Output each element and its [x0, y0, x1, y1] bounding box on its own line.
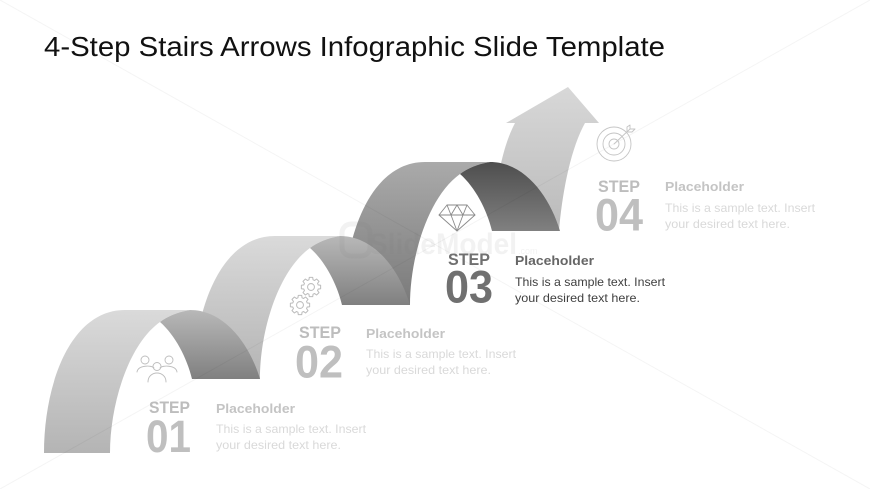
step 2 text: STEP [299, 323, 341, 342]
step 2 text: 02 [295, 336, 343, 388]
step 1 text: This is a sample text. Insert [216, 422, 367, 436]
icon: target [597, 125, 635, 161]
step 2 text [295, 323, 517, 388]
step 4 text: STEP [598, 177, 640, 196]
step 3 text [445, 250, 666, 312]
icon: diamond [439, 205, 475, 231]
step 3 text: your desired text here. [515, 291, 640, 305]
icon: gears [290, 277, 321, 315]
step 1 text: STEP [149, 398, 190, 417]
step 1 text: your desired text here. [216, 438, 341, 452]
step 4 text [595, 177, 816, 240]
step 4 text: Placeholder [665, 179, 744, 194]
watermark: .com [518, 246, 538, 256]
step 3 text: This is a sample text. Insert [515, 275, 666, 289]
step 2 text: This is a sample text. Insert [366, 347, 517, 361]
step 1 text: 01 [146, 411, 191, 462]
arch: step 3 [344, 162, 560, 305]
arrow: final rising arrow [495, 87, 599, 231]
step 3 text: STEP [448, 250, 490, 269]
step 4 text: 04 [595, 190, 643, 240]
title: 4-Step Stairs Arrows Infographic Slide Template [44, 31, 665, 62]
arch: step 2 [194, 236, 410, 379]
step 2 text: your desired text here. [366, 363, 491, 377]
watermark: SlideModel [369, 228, 517, 261]
step 3 text: 03 [445, 262, 493, 312]
arch: step 1 [44, 310, 260, 453]
step 4 text: your desired text here. [665, 217, 790, 231]
step 2 text: Placeholder [366, 326, 445, 341]
step 4 text: This is a sample text. Insert [665, 201, 816, 215]
step 3 text: Placeholder [515, 253, 594, 268]
step 1 text: Placeholder [216, 401, 295, 416]
step 1 text [146, 398, 367, 462]
icon: people [137, 356, 177, 382]
